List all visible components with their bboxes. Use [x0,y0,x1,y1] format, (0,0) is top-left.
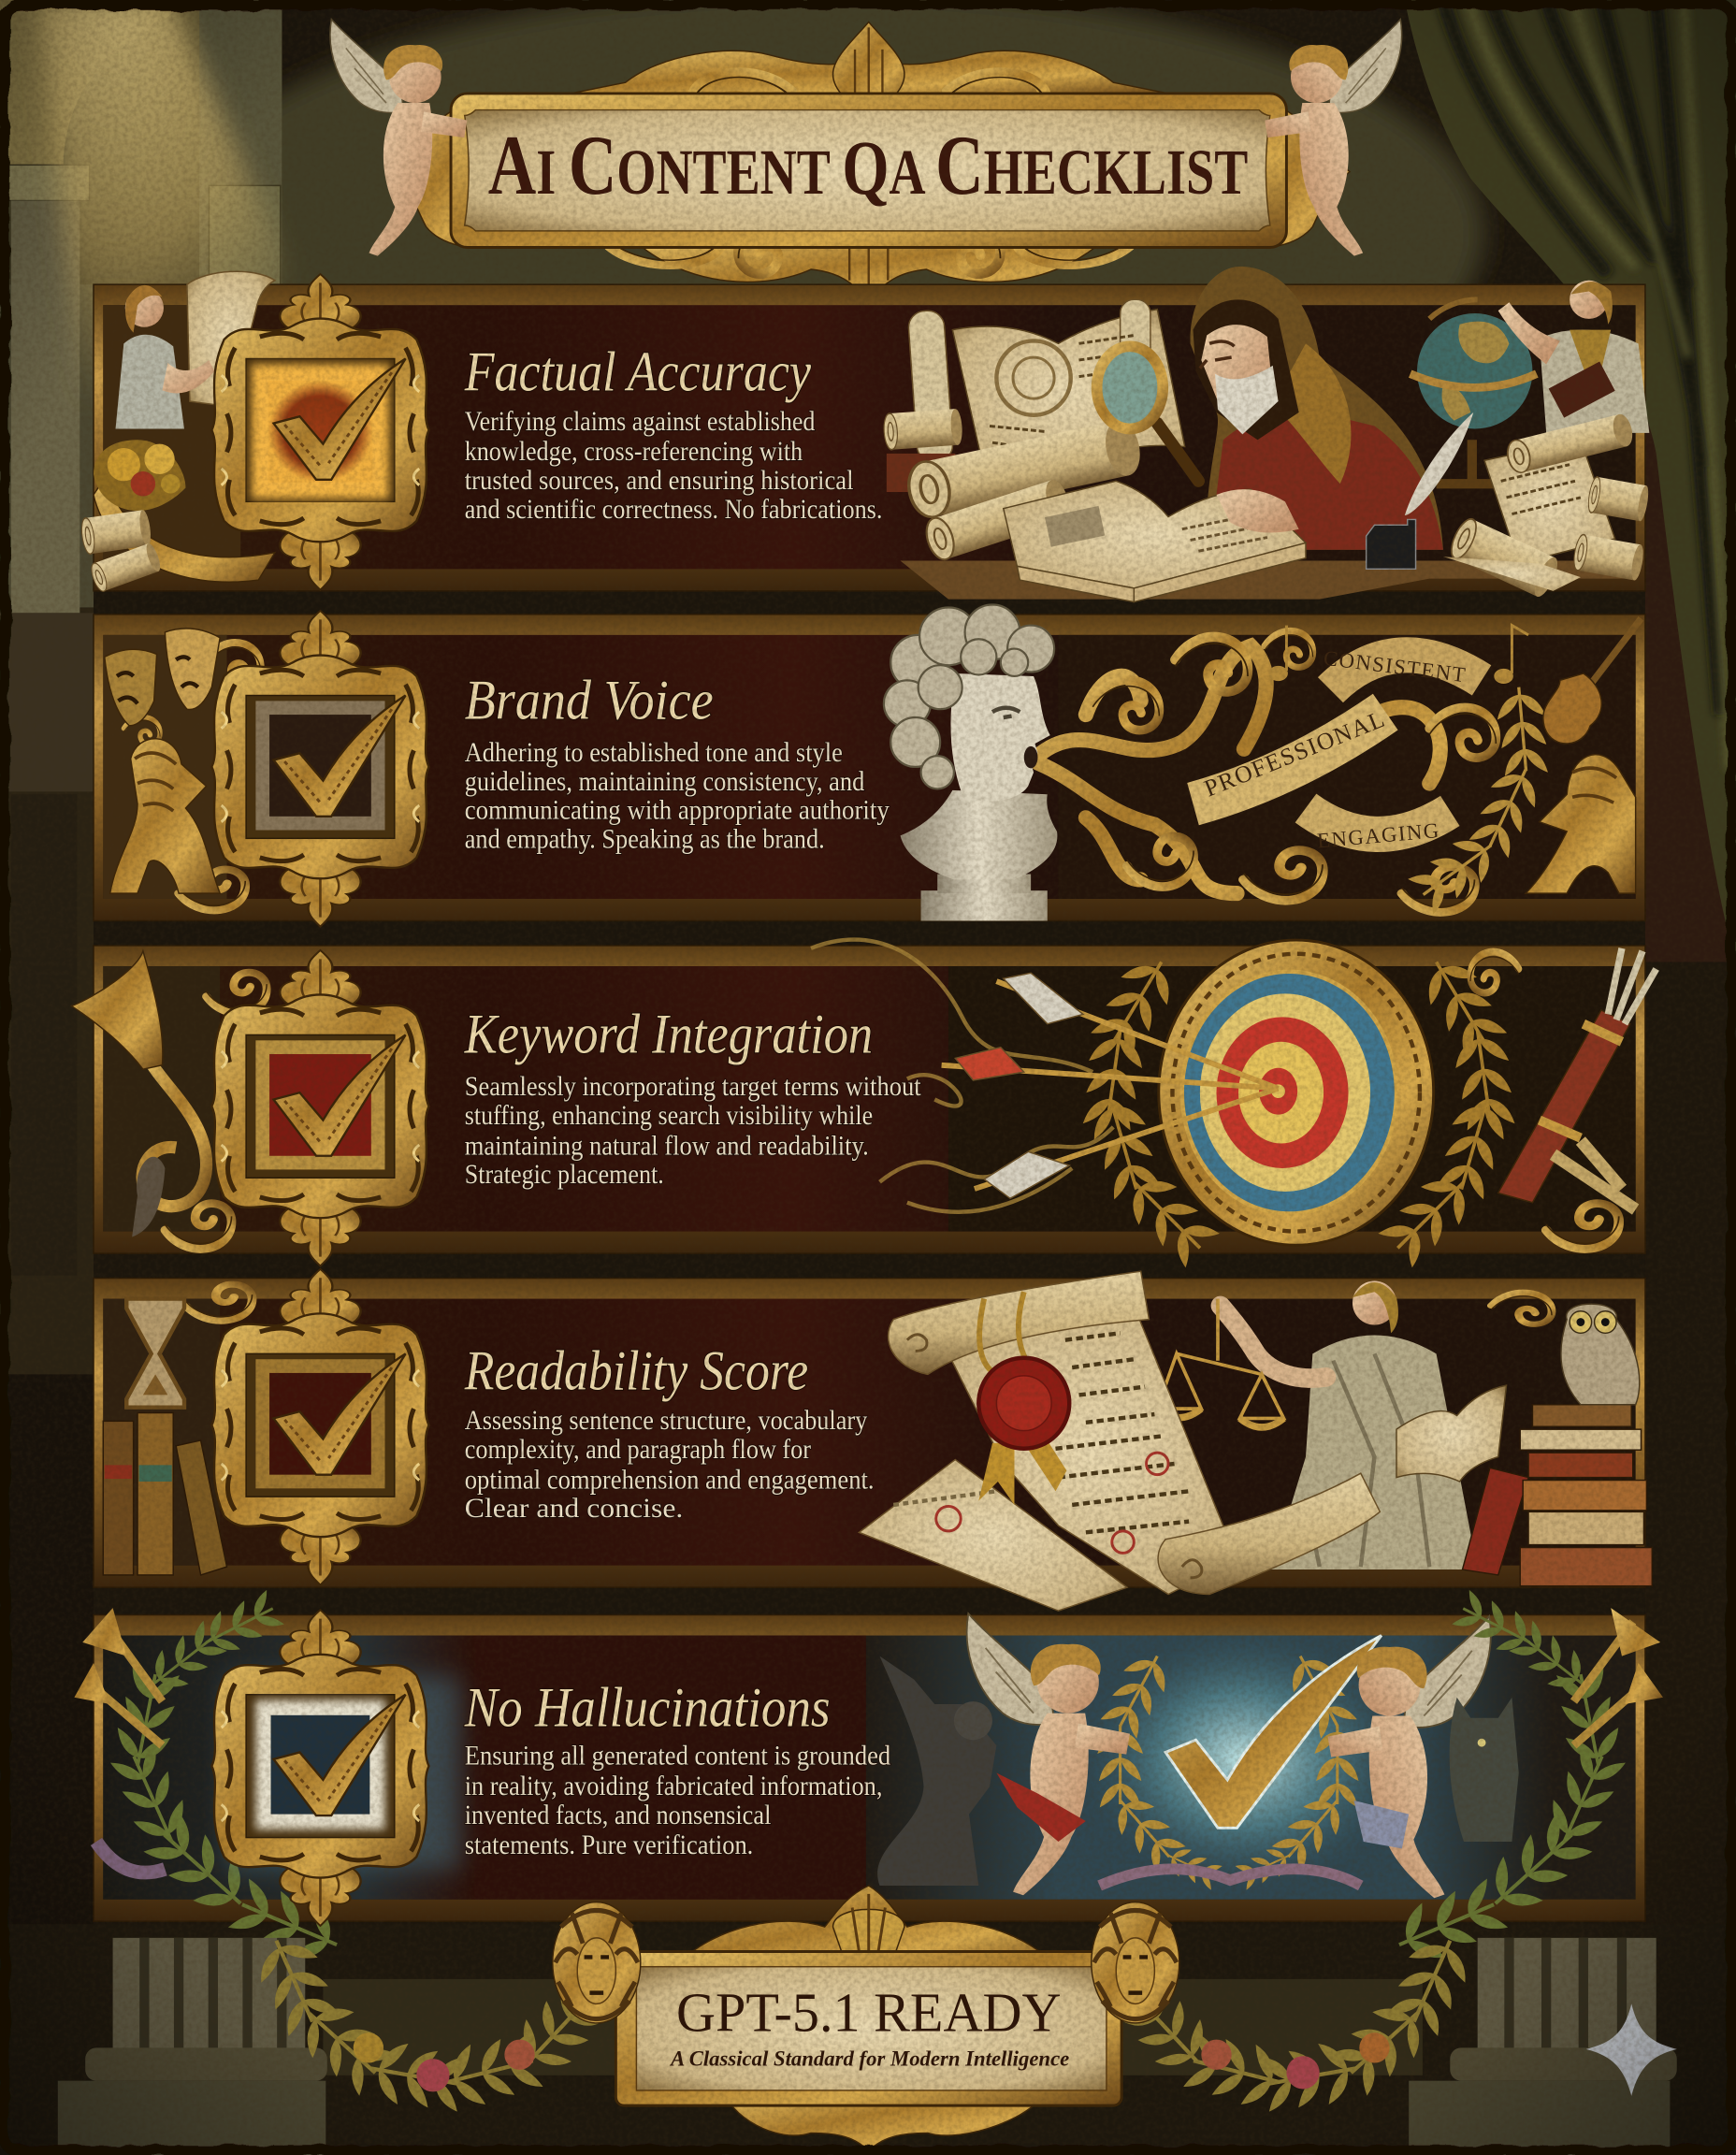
woman with scroll [116,271,275,428]
scroll with wax seal [859,1271,1380,1611]
quiver [1498,948,1656,1203]
bottom roll [1158,1473,1380,1594]
body text [465,1072,921,1190]
body text: complexity, and paragraph flow for [465,1435,811,1465]
gold flourish and ribbons [1037,626,1636,920]
body text [465,1742,891,1860]
left trumpets [74,1608,162,1745]
ribbon: engaging [1306,808,1450,852]
columns, bottom [58,1938,1677,2155]
footer lower ornament [722,2087,1048,2151]
stone arch and pillars, left [0,0,282,1276]
woman with book [1498,281,1649,433]
owl [1561,1304,1640,1405]
footer plaque [615,1886,1121,2151]
flourish, right [1470,952,1636,1249]
footer parchment [636,1967,1107,2090]
monk [1191,267,1443,550]
ribbon: engaging: ENGAGING [1316,818,1441,852]
loose pages [859,1459,1127,1611]
heading: Brand Voice [465,669,714,731]
scales [1157,1299,1283,1427]
body text: statements. Pure verification. [465,1830,753,1860]
cornucopia [94,440,275,582]
music notes [1270,626,1528,683]
check frame [211,611,429,927]
body text [465,738,890,855]
side scrolls [392,110,1350,248]
wax seal [978,1292,1069,1505]
curtain, upper right [1405,0,1736,962]
body text: Clear and concise. [465,1494,683,1524]
body text: maintaining natural flow and readability. [465,1131,869,1161]
top crest [571,22,1168,117]
theatre masks [105,629,220,726]
tagline: A Classical Standard for Modern Intelligence [669,2047,1069,2070]
badge text: GPT-5.1 READY [676,1983,1061,2044]
open manuscript [907,299,1185,474]
footer frame [615,1952,1121,2105]
body text: Strategic placement. [465,1160,664,1190]
heading: No Hallucinations [464,1677,831,1740]
body text: trusted sources, and ensuring historical [465,466,854,496]
guitar [1543,618,1642,744]
panel: keyword integration [71,940,1656,1275]
body text: Adhering to established tone and style [465,738,843,768]
gold frame [451,94,1286,247]
red drape [996,1773,1086,1842]
stack of books [1520,1405,1652,1586]
check frame [211,950,429,1266]
lower open book [1004,481,1306,602]
lady justice [1157,1280,1478,1569]
right trumpets [1574,1608,1663,1745]
title text: AI CONTENT QA CHECKLIST [488,118,1248,212]
garlands [244,1927,1483,2119]
dark ornate ground [1059,635,1636,899]
hourglass [126,1299,184,1408]
check frame [211,1269,429,1584]
heading: Keyword Integration [464,1004,873,1066]
lion, right [1526,755,1636,893]
flourish, top left [185,1284,253,1321]
check frame [211,1610,460,1926]
bottom crest [612,219,1127,301]
lion head, left [553,1902,641,2023]
right laurel [1386,1584,1633,1975]
title plaque [392,22,1350,301]
flourish, top right [1491,1293,1552,1324]
scrolls, lower [883,409,1145,563]
heading: Readability Score [464,1340,808,1403]
body text: Verifying claims against established [465,407,816,437]
demon, right [1450,1698,1519,1842]
top roll [889,1271,1149,1374]
body text [465,407,882,525]
footer crest [673,1886,1059,1968]
body text: Assessing sentence structure, vocabulary [465,1406,868,1436]
central wreath [1094,1644,1364,1894]
demon, left [877,1656,996,1886]
body text [465,1406,875,1524]
red book [1463,1468,1528,1575]
laurels around target [1076,947,1522,1275]
dark ground behind target [948,966,1636,1232]
scene: scholar with books [883,267,1650,602]
body text: and scientific correctness. No fabrications. [465,495,882,525]
check frame [211,274,429,590]
panel: brand voice [94,605,1645,927]
scrolls, left [80,510,163,593]
body text: Seamlessly incorporating target terms without [465,1072,921,1102]
blue drape [1353,1801,1409,1848]
body text: invented facts, and nonsensical [465,1801,771,1830]
lion, left [110,739,220,893]
arrows [942,973,1279,1198]
books [103,1413,227,1575]
cherub: title right [1265,20,1402,256]
sparkle mark [1586,2003,1677,2096]
cherub, right [1328,1616,1491,1898]
body text: communicating with appropriate authority [465,796,890,826]
body text: in reality, avoiding fabricated information, [465,1772,882,1801]
body text: Ensuring all generated content is grounded [465,1742,891,1772]
sky glow [1072,1622,1416,1897]
body text: optimal comprehension and engagement. [465,1465,875,1495]
lion head, right [1092,1902,1179,2023]
inkwell and quill [1367,412,1473,569]
body text: stuffing, enhancing search visibility while [465,1101,873,1131]
gold dust trails [811,940,1113,1212]
body text: knowledge, cross-referencing with [465,437,803,467]
parchment [465,110,1270,231]
body text: guidelines, maintaining consistency, and [465,767,865,797]
curled hair [884,605,1054,788]
magnifying glass [1097,346,1198,481]
horn [71,951,207,1237]
flourish, left [123,643,261,910]
flourish, left [165,973,267,1249]
main page [942,1306,1237,1594]
ribbon: professional: PROFESSIONAL [1200,704,1389,803]
panel: factual accuracy [80,267,1650,602]
ribbons, left [96,1842,165,1873]
globe [1410,299,1537,484]
body text: and empathy. Speaking as the brand. [465,825,825,855]
panel: no hallucinations [74,1584,1663,1975]
hand [1216,489,1299,533]
heading: Factual Accuracy [464,340,811,403]
laurel [1402,685,1554,920]
ribbon: consistent: CONSISTENT [1323,646,1468,687]
scrolls, right [1443,412,1650,600]
target [1159,940,1434,1245]
cherub, left [967,1613,1130,1895]
cherub: title left [330,20,467,256]
marble bust [884,605,1057,920]
light ray [38,0,296,412]
open book [1396,1385,1507,1482]
panel: readability score [94,1269,1652,1611]
large glowing check [1165,1636,1382,1828]
left laurel [103,1584,350,1975]
